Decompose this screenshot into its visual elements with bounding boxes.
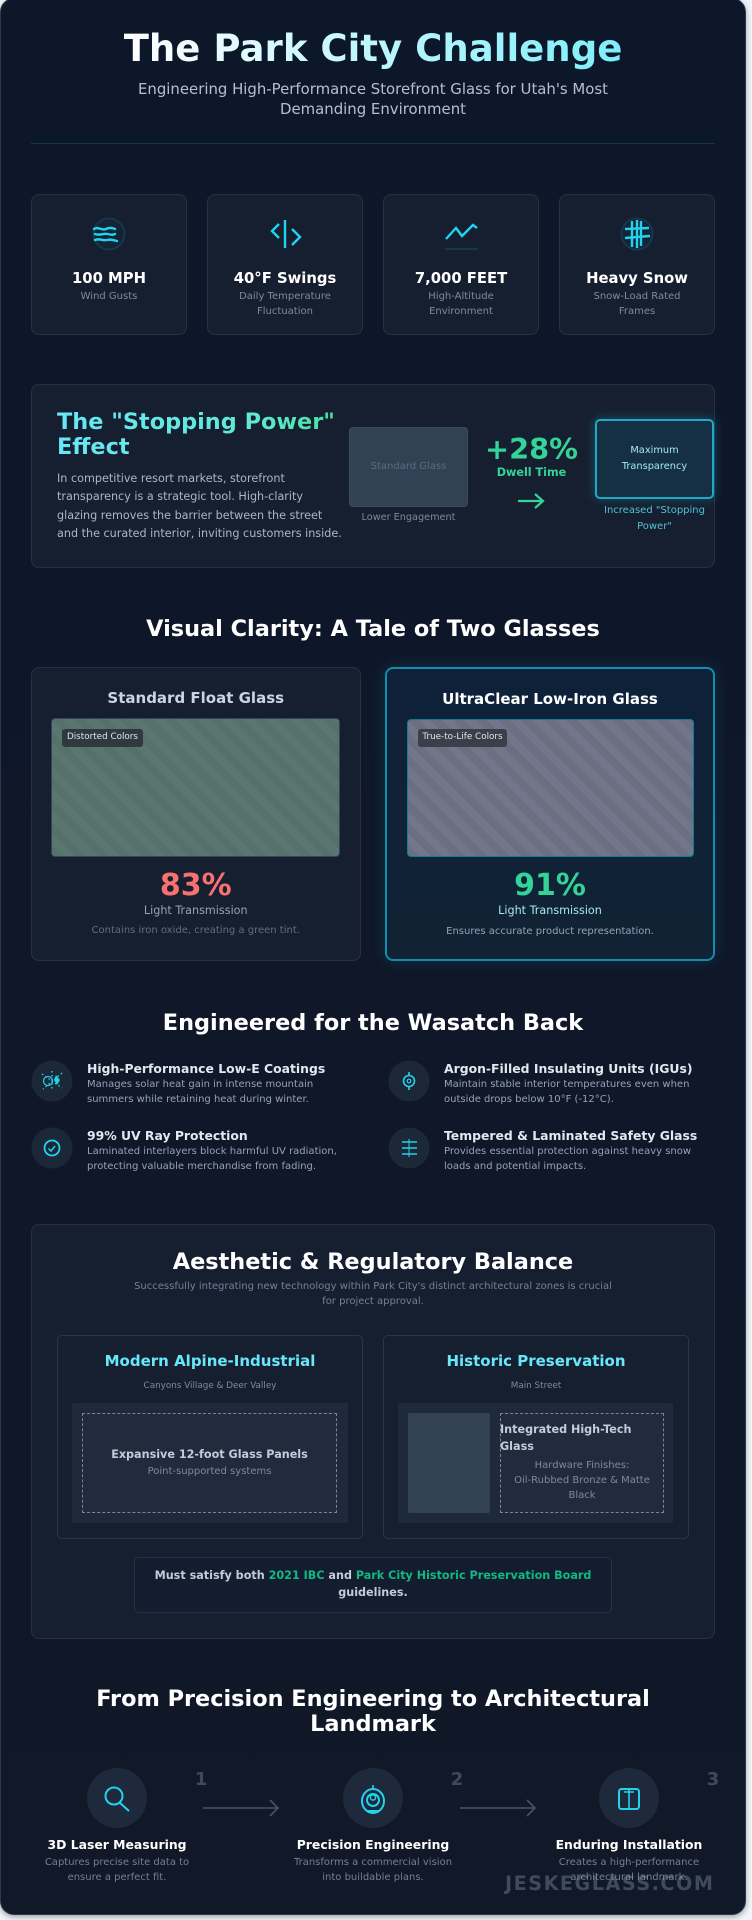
glass sample [407,719,694,857]
metric value: +28% [485,432,578,466]
panel sublabel [514,1460,650,1501]
feature: argon-filled units [388,1060,693,1105]
glass sample [51,718,340,857]
zone card: historic preservation [383,1335,689,1539]
feature: low-e coatings [32,1060,325,1105]
arrow [518,493,544,509]
feature description: protecting valuable merchandise from fading. [87,1161,316,1172]
light transmission label: Light Transmission [144,904,248,917]
header [31,27,715,144]
step description: Transforms a commercial vision [294,1857,452,1868]
feature: uv protection [32,1128,337,1172]
description: Ensures accurate product representation. [446,926,654,937]
compliance callout [134,1557,612,1613]
stat value: Heavy Snow [586,270,688,287]
subtitle [138,80,608,118]
stat label [593,291,681,317]
feature description: outside drops below 10°F (-12°C). [444,1094,614,1105]
panel: standard float glass [31,667,360,961]
stat label [239,291,331,317]
step description [294,1857,452,1883]
percentage: 91% [514,868,586,903]
stopping power heading: Effect [57,434,130,460]
stopping power body text: In competitive resort markets, storefront [57,472,285,485]
stat value: 40°F Swings [234,270,336,287]
step description: ensure a perfect fit. [68,1872,166,1883]
heading: precision engineering: From Precision Engineering to Architectural [96,1686,650,1712]
icon: engineering [343,1768,403,1828]
arrow 2 [460,1800,536,1816]
step description: architectural landmark. [570,1872,688,1883]
callout text [155,1569,591,1599]
panel label: Integrated High-Tech [500,1423,631,1436]
heading: wasatch back: Engineered for the Wasatch Back [163,1010,583,1036]
feature description: Provides essential protection against heavy snow [444,1146,691,1157]
card title: UltraClear Low-Iron Glass [442,690,658,708]
stat card: wind [31,194,187,335]
panel sublabel: Black [568,1490,596,1501]
standard glass box: Standard Glass [371,461,446,472]
icon: altitude [445,223,478,250]
feature description: summers while retaining heat during winter. [87,1094,309,1105]
historic frame block [408,1413,490,1513]
heading: visual clarity: Visual Clarity: A Tale of Two Glasses [146,616,600,642]
panel sublabel: Hardware Finishes: [535,1460,629,1471]
feature description: Manages solar heat gain in intense mountain [87,1079,313,1090]
standard glass caption: Lower Engagement [362,512,455,523]
arrow 1 [203,1800,279,1816]
stat label [428,291,494,317]
feature title: Argon-Filled Insulating Units (IGUs) [444,1061,693,1076]
panel heading: Aesthetic & Regulatory Balance [173,1249,573,1275]
step description [539,1855,719,1885]
step description: Creates a high-performance [559,1857,699,1868]
step number 2: 2 [451,1769,463,1790]
maximum transparency box: Maximum [630,445,679,456]
standard glass box [349,427,468,507]
stopping power body text: transparency is a strategic tool. High-clarity [57,490,303,503]
increased stopping power caption: Increased "Stopping [604,505,705,516]
panel sublabel: Point-supported systems [148,1466,271,1477]
light transmission label: Light Transmission [498,904,602,917]
stopping power heading: The "Stopping Power" [57,409,335,435]
feature description [87,1079,313,1105]
stopping power body text: and the curated interior, inviting customers inside. [57,527,342,540]
increased stopping power caption [604,505,705,532]
feature title: Tempered & Laminated Safety Glass [444,1128,697,1143]
icon: target [388,1060,430,1102]
stopping power body text [57,472,342,540]
heading: precision engineering: Landmark [310,1711,436,1737]
dashed glass panel [500,1413,664,1513]
stat label: Frames [619,306,655,317]
feature description [444,1146,691,1172]
icon: installation [599,1768,659,1828]
subtitle: Engineering High-Performance Storefront Glass for Utah's Most [138,80,608,98]
feature description: loads and potential impacts. [444,1161,586,1172]
feature description: Maintain stable interior temperatures even when [444,1079,689,1090]
feature title: 99% UV Ray Protection [87,1128,248,1143]
zone location: Canyons Village & Deer Valley [144,1381,276,1391]
panel: aesthetic and regulatory balance [31,1224,715,1639]
icon: snow [620,218,654,250]
watermark: JESKEGLASS.COM [505,1872,714,1895]
stat card: temperature [207,194,363,335]
stat label: Daily Temperature [239,291,331,302]
panel label: Glass [500,1440,534,1453]
step description: into buildable plans. [322,1872,424,1883]
tag: distorted colors: Distorted Colors [67,732,138,742]
icon: temperature swings [270,220,302,248]
icon: sparkle [32,1060,72,1102]
glazing diagram [398,1403,673,1523]
stat label: Environment [429,306,493,317]
stopping power heading [57,409,335,460]
panel intro [134,1281,612,1307]
card title: Standard Float Glass [107,689,284,707]
zone card: modern alpine-industrial [57,1335,363,1539]
process step 3 [539,1768,719,1898]
callout text: guidelines. [338,1586,408,1599]
panel sublabel: Oil-Rubbed Bronze & Matte [514,1475,650,1486]
callout text: Must satisfy both 2021 IBC and Park City Historic Preservation Board [155,1569,591,1582]
panel intro: Successfully integrating new technology within Park City's distinct architectural zones is crucial [134,1281,612,1292]
dashed glass panel [82,1413,337,1513]
tag: true-to-life colors [418,729,507,747]
feature description [444,1079,689,1105]
panel: ultraclear low-iron glass [385,667,715,961]
icon: layers [388,1128,430,1168]
heading: precision engineering [96,1686,650,1737]
step description [45,1857,189,1883]
header divider [31,143,715,144]
stat label: Fluctuation [257,306,313,317]
increased stopping power caption: Power" [637,520,672,532]
description: Contains iron oxide, creating a green tint. [92,925,300,936]
zone title: Historic Preservation [446,1352,626,1370]
title: The Park City Challenge [124,27,622,70]
icon: wind [92,218,126,250]
stat label: Snow-Load Rated [593,291,681,302]
feature: safety glass [388,1128,697,1172]
stat value: 100 MPH [72,270,146,287]
metric label: Dwell Time [497,466,566,479]
glazing diagram [72,1403,348,1523]
stat value: 7,000 FEET [415,270,507,287]
stat card: snow [559,194,715,335]
panel: stopping power [31,384,715,568]
panel label [500,1423,631,1453]
process step 1 [45,1768,189,1883]
zone title: Modern Alpine-Industrial [105,1352,315,1370]
icon: check circle [32,1128,72,1168]
feature description: Laminated interlayers block harmful UV radiation, [87,1146,337,1157]
percentage: 83% [160,868,232,903]
step number 1: 1 [195,1769,207,1790]
stat label: High-Altitude [428,291,494,302]
feature description [87,1146,337,1172]
zone location: Main Street [511,1381,561,1391]
tag: true-to-life colors: True-to-Life Colors [422,732,503,742]
tag: distorted colors [62,729,143,746]
icon: magnifier [87,1768,147,1828]
maximum transparency box [595,419,714,499]
step title: Enduring Installation [556,1837,702,1852]
step title: Precision Engineering [297,1837,449,1852]
process step 2 [294,1768,452,1883]
subtitle: Demanding Environment [280,100,466,118]
step number 3: 3 [707,1769,719,1790]
step description: Captures precise site data to [45,1857,189,1868]
stat label: Wind Gusts [81,291,137,302]
stopping power body text: glazing removes the barrier between the street [57,509,322,522]
step title: 3D Laser Measuring [47,1837,187,1852]
panel intro: for project approval. [322,1296,424,1307]
stat card: altitude [383,194,539,335]
panel label: Expansive 12-foot Glass Panels [111,1448,308,1461]
dwell time metric [485,432,578,509]
maximum transparency box: Transparency [622,460,687,472]
feature title: High-Performance Low-E Coatings [87,1061,325,1076]
